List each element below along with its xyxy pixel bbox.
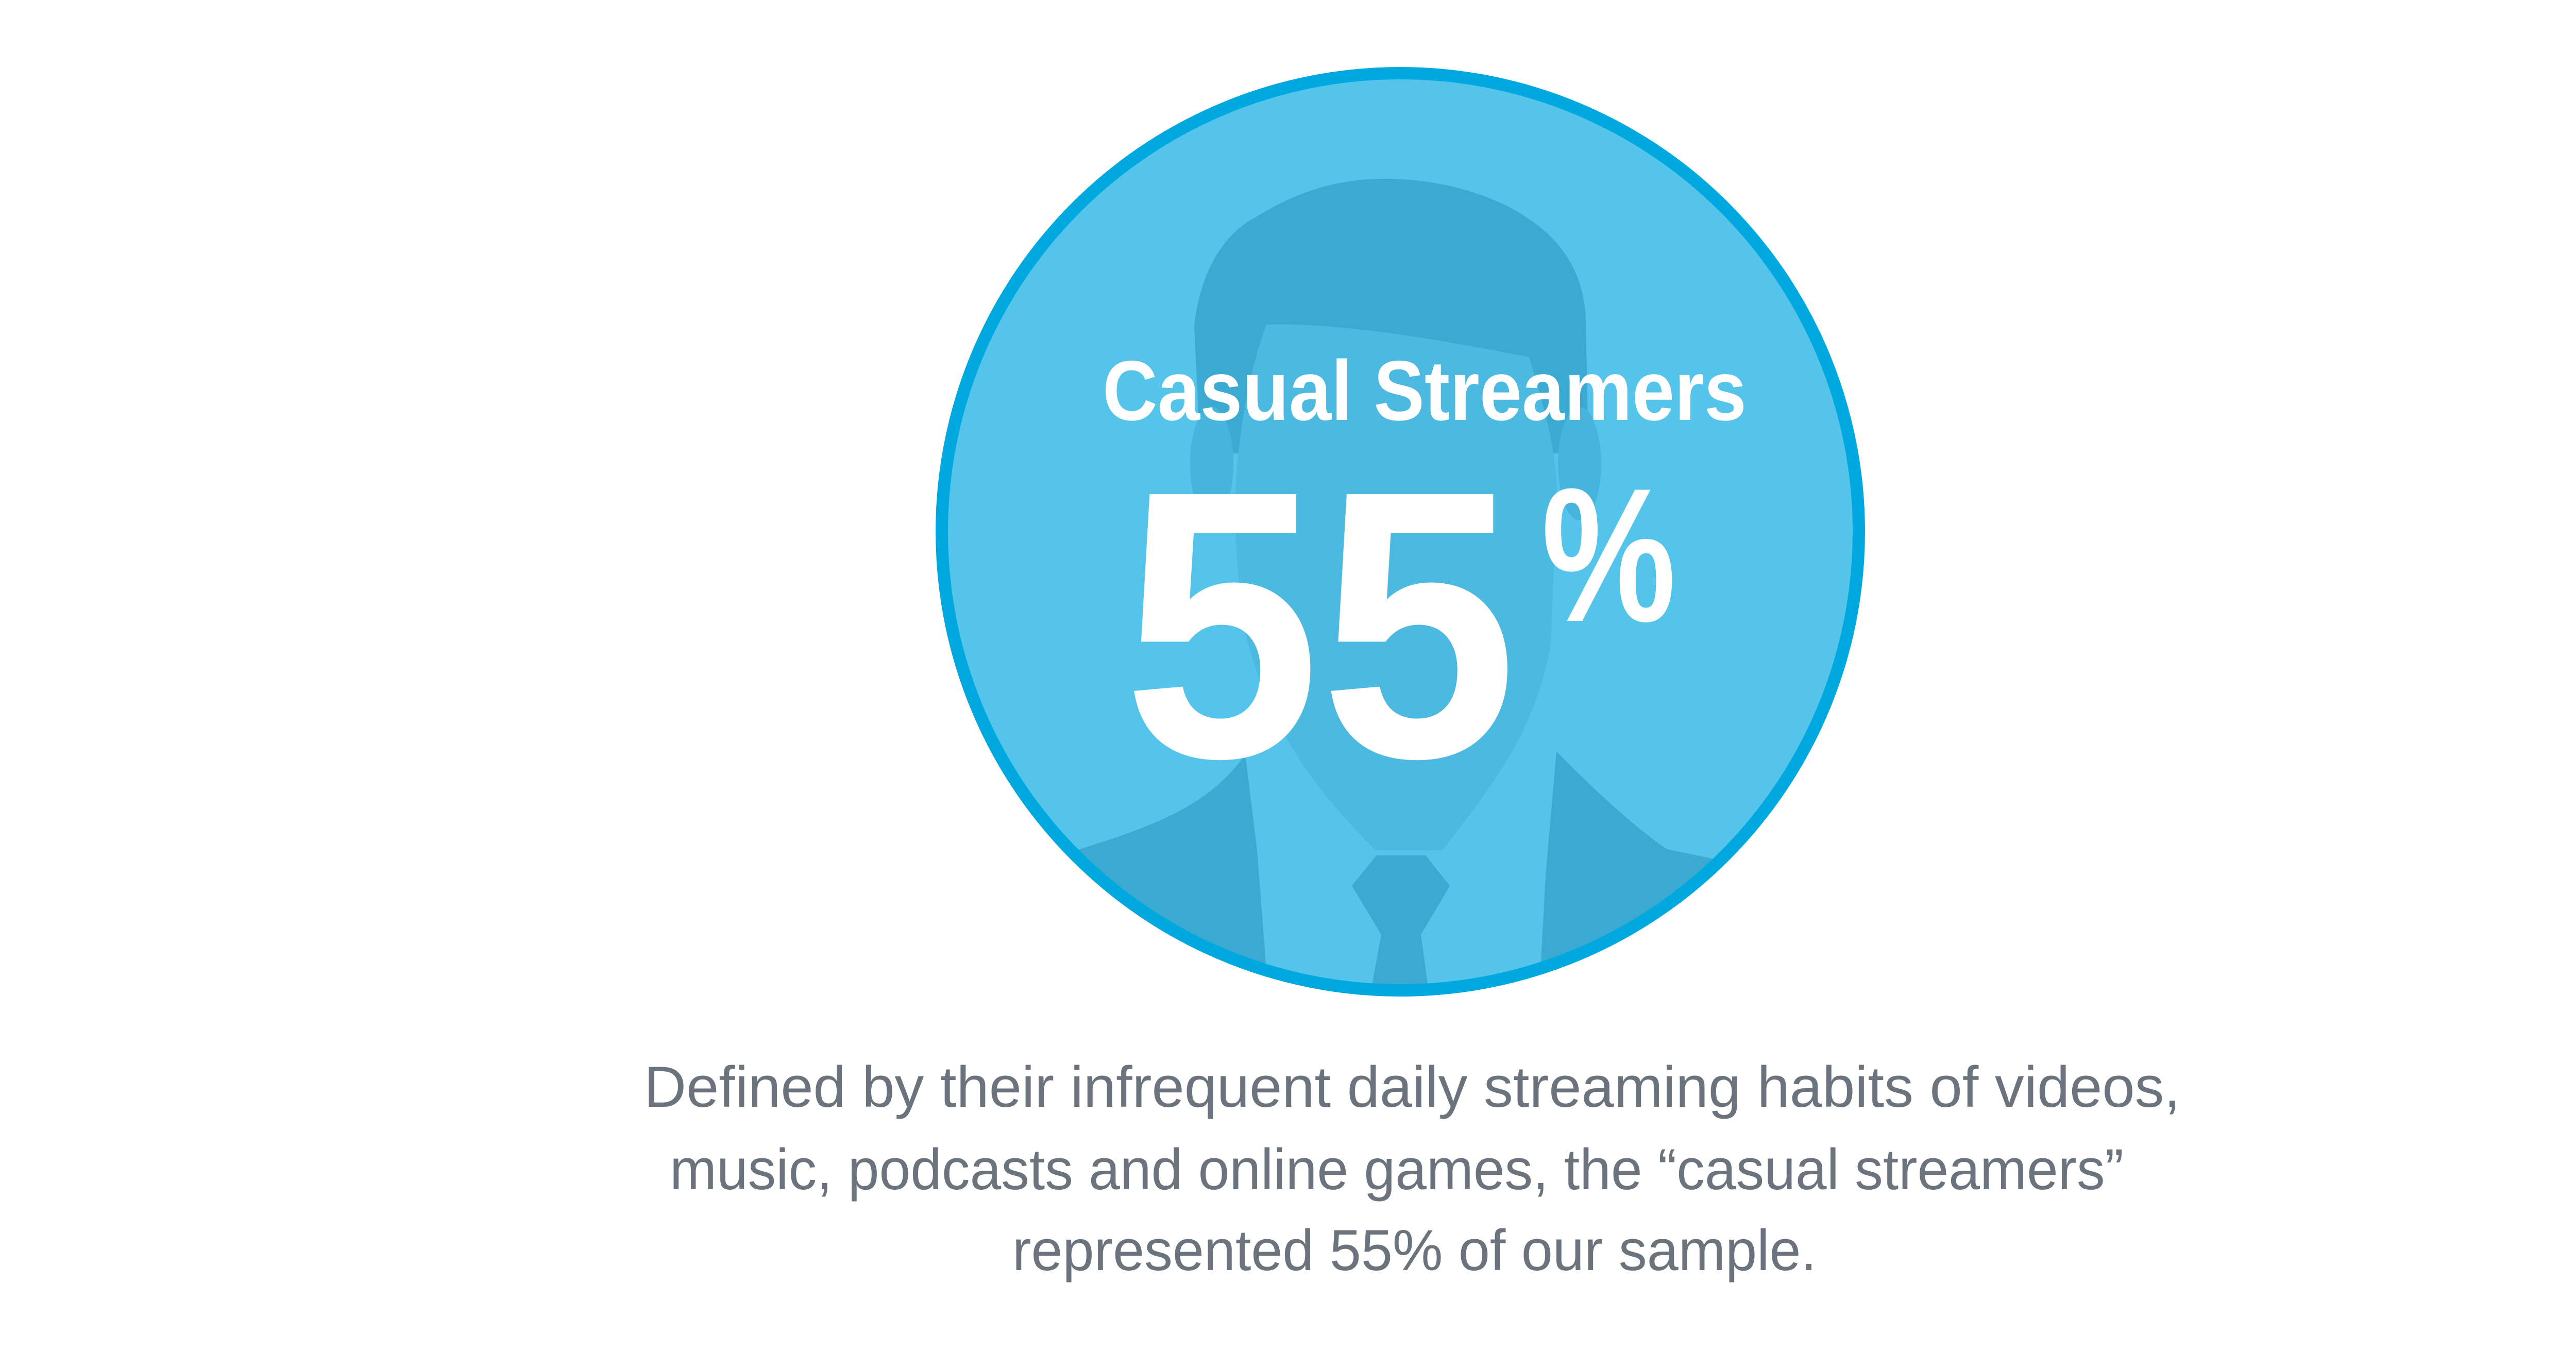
description text — [644, 1055, 2180, 1282]
hair — [1194, 179, 1588, 453]
suit right — [1541, 751, 1713, 961]
description text: music, podcasts and online games, the “casual streamers” — [670, 1137, 2124, 1202]
illustration: person silhouette — [1079, 179, 1713, 984]
description text: represented 55% of our sample. — [1012, 1218, 1817, 1282]
ears — [1190, 407, 1233, 494]
persona circle — [936, 67, 1865, 997]
stat: 55%: 55 — [1123, 411, 1517, 837]
tie — [1352, 855, 1450, 984]
suit left — [1079, 757, 1266, 964]
description text: Defined by their infrequent daily streaming habits of videos, — [644, 1055, 2180, 1119]
heading: Casual Streamers: Casual Streamers — [1103, 343, 1747, 438]
stat: 55%: % — [1541, 449, 1676, 662]
face — [1234, 325, 1557, 850]
